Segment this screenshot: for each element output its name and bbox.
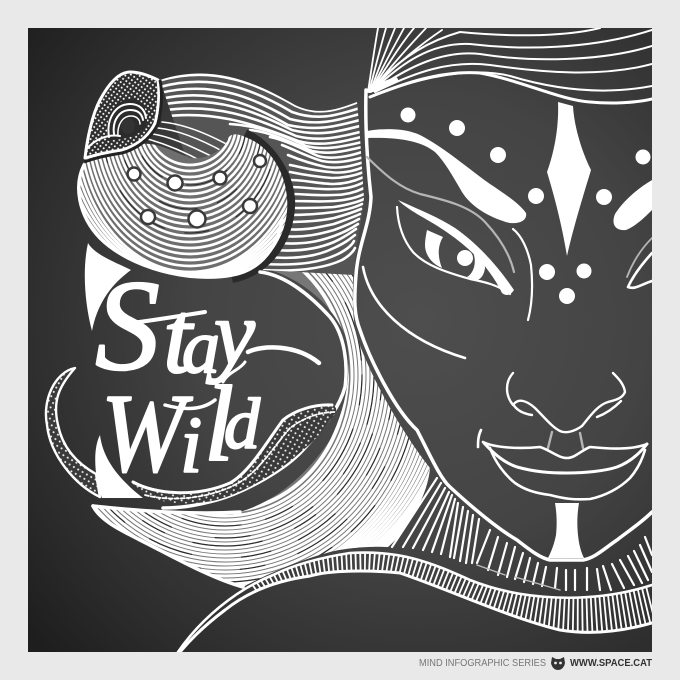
lower hair sweep xyxy=(96,270,430,586)
thin strands under the feather xyxy=(148,121,226,158)
word: Stay xyxy=(96,282,322,385)
icon: cat head xyxy=(551,657,565,670)
word: Wild: W xyxy=(101,372,193,496)
upper hair waves xyxy=(160,74,364,275)
eye crease xyxy=(367,157,514,272)
nose xyxy=(507,373,625,448)
word: Wild xyxy=(106,360,262,474)
left horn claw xyxy=(85,243,131,331)
peacock feather xyxy=(84,72,161,162)
lips xyxy=(478,430,647,499)
speech bubble arc outline xyxy=(163,272,346,508)
footer series label: MIND INFOGRAPHIC SERIES xyxy=(419,658,546,669)
right eye xyxy=(627,238,652,288)
upper hair strands over forehead xyxy=(368,28,652,103)
forehead dots xyxy=(400,108,650,304)
lower hair right band xyxy=(374,468,430,547)
right eyebrow xyxy=(613,180,652,230)
temple line xyxy=(513,229,532,320)
cheek line xyxy=(363,267,465,358)
lower hair outline xyxy=(93,506,243,587)
footer xyxy=(419,657,652,670)
word: Stay: t xyxy=(163,280,194,395)
pupil xyxy=(457,250,473,266)
hair bun xyxy=(77,130,296,283)
lettering: Stay Wild xyxy=(96,282,322,474)
word: Wild: d xyxy=(224,384,261,464)
face outline xyxy=(355,90,652,560)
left eye xyxy=(397,200,514,295)
bun dots xyxy=(128,155,266,228)
neck ticks xyxy=(392,478,652,590)
neck tick crossbar xyxy=(477,565,560,590)
footer website: WWW.SPACE.CAT xyxy=(570,658,652,669)
left eyebrow xyxy=(367,129,526,223)
dotted wave xyxy=(133,405,336,503)
word: Stay: S xyxy=(95,254,160,398)
necklace band xyxy=(178,553,652,652)
lower hair top edge xyxy=(93,506,240,513)
word: Stay: y xyxy=(206,282,255,384)
word: Wild: i xyxy=(180,402,202,490)
left tail xyxy=(46,368,100,497)
word: Wild: l xyxy=(204,365,234,484)
lower claw xyxy=(95,435,143,498)
chin mark xyxy=(548,503,584,558)
word: Stay: a xyxy=(182,305,220,389)
forehead diamond xyxy=(547,102,591,256)
